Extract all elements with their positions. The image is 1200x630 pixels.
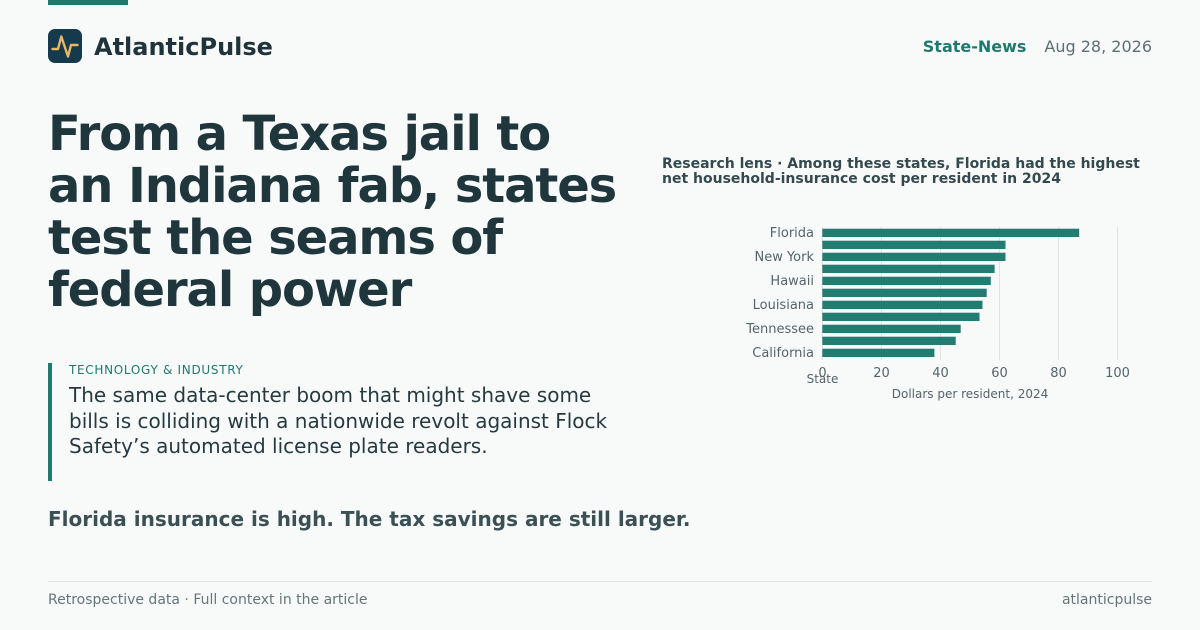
title: an Indiana fab, states xyxy=(48,158,616,214)
footer note: Retrospective data · Full context in the article xyxy=(48,592,367,608)
summary text: bills is colliding with a nationwide revolt against Flock xyxy=(69,409,607,433)
x axis ticks: 0 xyxy=(818,366,827,381)
state labels: New York xyxy=(754,250,814,265)
title: test the seams of xyxy=(48,210,502,266)
footer brand: atlanticpulse xyxy=(1062,592,1152,608)
x axis ticks: 60 xyxy=(991,366,1008,381)
x axis ticks: 20 xyxy=(873,366,890,381)
state labels xyxy=(745,226,814,361)
summary callout xyxy=(48,363,607,481)
bars xyxy=(822,229,1079,357)
icon: pulse logo xyxy=(48,29,82,63)
bar chart xyxy=(745,226,1130,401)
x axis ticks xyxy=(818,366,1130,381)
takeaway: Florida insurance is high. The tax savings are still larger. xyxy=(48,507,691,531)
title: From a Texas jail to xyxy=(48,106,550,162)
state labels: Hawaii xyxy=(770,274,814,289)
x axis ticks: 40 xyxy=(932,366,949,381)
chart heading: Research lens · Among these states, Florida had the highest xyxy=(662,156,1140,172)
summary text: Safety’s automated license plate readers. xyxy=(69,434,488,458)
y axis title: State xyxy=(807,372,838,386)
category label: TECHNOLOGY & INDUSTRY xyxy=(69,363,244,377)
brand header xyxy=(48,29,273,63)
x axis ticks: 80 xyxy=(1050,366,1067,381)
chart heading: net household-insurance cost per resident in 2024 xyxy=(662,171,1061,187)
state labels: California xyxy=(752,346,814,361)
summary text: The same data-center boom that might shave some xyxy=(69,383,591,407)
x axis title: Dollars per resident, 2024 xyxy=(892,387,1048,401)
title: federal power xyxy=(48,262,411,318)
brand name: AtlanticPulse xyxy=(94,33,273,61)
state labels: Florida xyxy=(770,226,814,241)
callout rule xyxy=(48,363,52,481)
section tag and date: State-News Aug 28, 2026 xyxy=(923,37,1152,56)
summary text xyxy=(68,383,607,458)
state labels: Tennessee xyxy=(745,322,814,337)
chart heading xyxy=(662,156,1140,187)
top accent bar xyxy=(48,0,128,5)
state labels: Louisiana xyxy=(753,298,814,313)
footer xyxy=(48,581,1152,618)
title xyxy=(48,106,616,318)
x axis ticks: 100 xyxy=(1105,366,1130,381)
